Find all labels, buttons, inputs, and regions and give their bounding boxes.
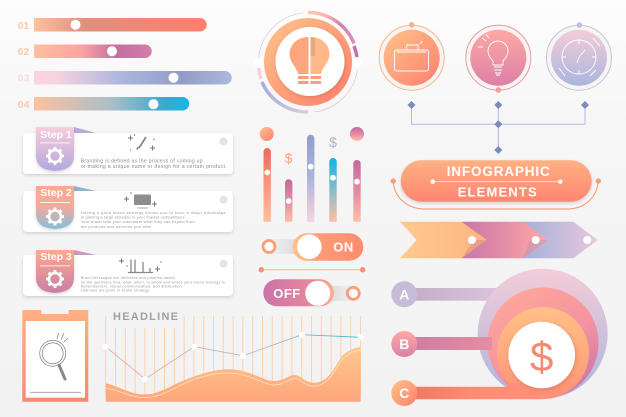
bar 02: 02 [18, 46, 29, 58]
card: step 2: Your brand tells your customers what they can expect from [81, 219, 195, 224]
card: step 3: Advertisement, visual communication, and distribution [81, 284, 182, 288]
bar B [412, 337, 492, 350]
card: step 3: Brand messages are delivered and planned based [81, 276, 175, 280]
bar 03 [18, 71, 232, 84]
bar 04: 04 [18, 99, 29, 111]
circle stack [478, 269, 608, 399]
dollar sign: $ [530, 333, 553, 380]
bar A [412, 288, 497, 301]
toggle off [263, 279, 359, 306]
trend line [106, 335, 361, 379]
step cards [23, 127, 233, 296]
toggle on: ON [333, 240, 354, 254]
title pill: ELEMENTS [458, 184, 537, 200]
circle icon: clock [546, 22, 612, 90]
bar 02 [18, 44, 152, 58]
slider 3 [307, 135, 314, 222]
vertical slider bars [260, 127, 364, 222]
progress bars 01-04 [18, 18, 232, 111]
toggle on [263, 233, 363, 261]
title pill [391, 160, 601, 209]
label C: C [399, 385, 409, 401]
title pill: INFOGRAPHIC [447, 164, 550, 179]
circle icon: briefcase [379, 22, 444, 90]
area [106, 347, 361, 402]
label B: B [399, 336, 409, 352]
card: step 3: on the questions how, what, when, to whom and where your brand strategy is [81, 280, 225, 284]
clipboard with magnifier [22, 310, 88, 402]
slider line [259, 267, 365, 272]
slider 5 [353, 160, 361, 222]
ball left [260, 127, 274, 141]
card: step 1: Step 1 [40, 129, 72, 141]
card: step 3: channels are parts of brand strategy. [81, 288, 150, 292]
card: step 2: Step 2 [40, 187, 72, 199]
label C [391, 380, 417, 406]
card: step 2 [23, 186, 233, 232]
card: step 3 [23, 250, 233, 296]
card: step 1 [23, 127, 233, 174]
slider 4: $ [329, 134, 337, 150]
bar 01 [18, 18, 207, 32]
card: step 1: or making a unique name or design for a certain product. [81, 164, 227, 170]
label A [391, 281, 417, 307]
slider 1 [264, 148, 271, 222]
card: step 1: Branding is defined as the process of coming up [81, 158, 203, 164]
headline: HEADLINE [113, 311, 178, 323]
circle icon: idea bulb [466, 25, 531, 93]
bar 01: 01 [18, 20, 29, 32]
card: step 2: in gaining a large increase in your market competitions. [81, 215, 186, 220]
ball right [350, 127, 364, 141]
connector with diamonds [408, 101, 589, 154]
bar C [412, 383, 560, 399]
bar 03: 03 [18, 72, 29, 84]
slider 2: $ [285, 150, 293, 166]
lightbulb emblem [254, 12, 362, 112]
label B [391, 331, 417, 357]
card: step 2: Having a good brand strategy allows you to have a major advantage [81, 210, 226, 215]
arrow banner [400, 222, 598, 258]
concentric money diagram [391, 269, 608, 406]
label A: A [399, 286, 409, 302]
card: step 2: the products and services you offer. [81, 224, 153, 229]
line and area chart [103, 316, 364, 402]
white coin [508, 322, 575, 388]
card: step 3: Step 3 [40, 251, 72, 263]
bar 04 [18, 97, 189, 111]
toggle off: OFF [273, 286, 301, 301]
